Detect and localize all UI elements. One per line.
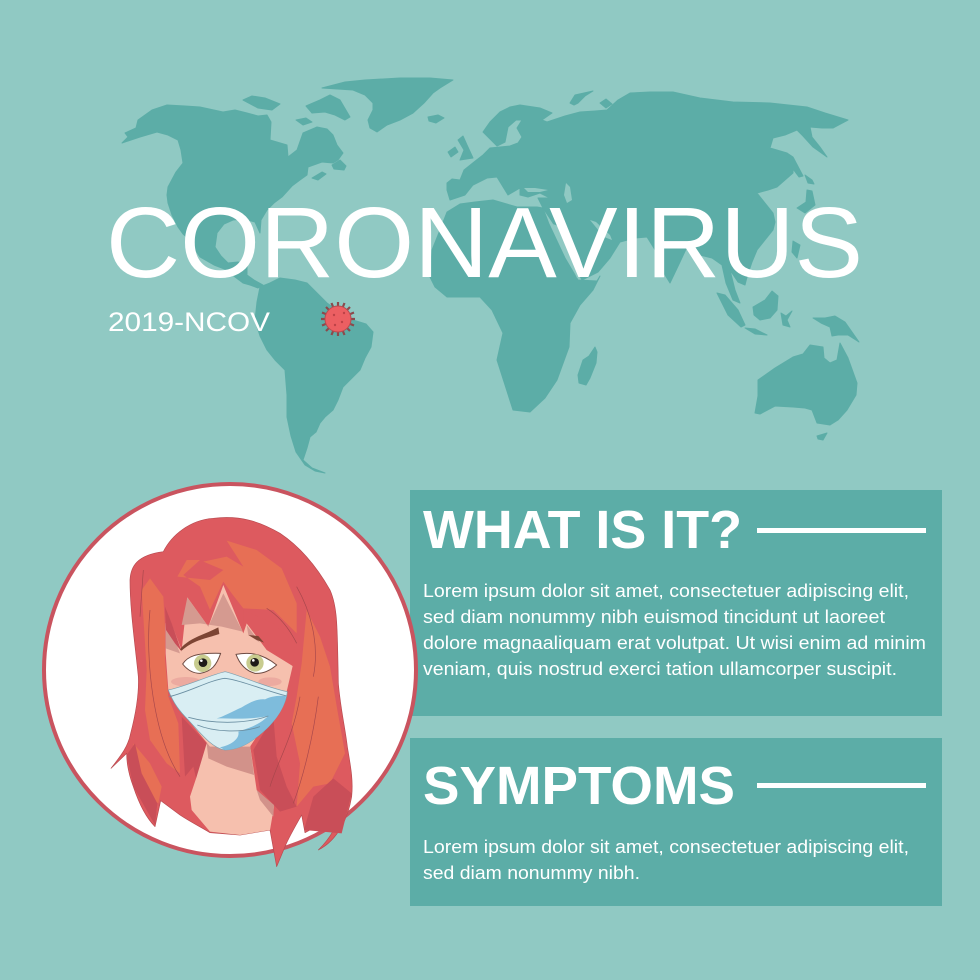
- map: South America: [255, 278, 373, 473]
- mask shading: [217, 696, 286, 750]
- map: North and Central America: [122, 105, 343, 288]
- forehead shadow: [166, 593, 260, 653]
- hair strand lines: [140, 570, 318, 803]
- map: seas (Black Sea, Caspian, Red Sea, Gulf): [524, 183, 612, 278]
- cheek blush: [171, 677, 201, 686]
- illustration: woman wearing mask: [111, 517, 352, 867]
- text block: symptoms: sed diam nonummy nibh.: [423, 863, 640, 883]
- map: Arctic islands: [243, 95, 350, 125]
- neck shadow: [207, 743, 274, 817]
- map: Eurasia: [447, 92, 848, 303]
- hair dark strands: [127, 717, 352, 833]
- map: New Guinea: [813, 316, 859, 342]
- panel: what is it: [410, 490, 942, 716]
- portrait circle: [44, 484, 416, 856]
- map: Novaya Zemlya and Russian islands: [570, 91, 612, 108]
- subtitle: 2019-NCOV: [108, 307, 270, 337]
- map: British Isles: [448, 136, 473, 160]
- panel: symptoms: [410, 738, 942, 906]
- world map: [122, 78, 859, 473]
- heading: symptoms: SYMPTOMS: [423, 756, 735, 816]
- front hair strands: [165, 607, 182, 652]
- title: CORONAVIRUS: [106, 187, 863, 299]
- map: Africa: [430, 200, 600, 412]
- heading: what is it: WHAT IS IT?: [423, 500, 742, 560]
- hair highlights: [133, 578, 180, 803]
- map: Greenland: [322, 78, 453, 132]
- hair back: [111, 517, 352, 867]
- face: [166, 585, 293, 747]
- eyebrows: [180, 627, 264, 651]
- eyes: [183, 653, 277, 673]
- text block: symptoms: [423, 837, 909, 883]
- text block: what is it: [423, 581, 926, 679]
- text block: what is it: dolore magnaaliquam erat volutpat. Ut wisi enim ad minim: [423, 633, 926, 653]
- map: Madagascar: [578, 347, 597, 385]
- mask folds: [169, 678, 287, 731]
- text block: what is it: sed diam nonummy nibh euismod tincidunt ut laoreet: [423, 607, 885, 627]
- face mask: [168, 672, 287, 750]
- map: Sakhalin and Japan: [787, 153, 815, 213]
- text block: symptoms: Lorem ipsum dolor sit amet, consectetuer adipiscing elit,: [423, 837, 909, 857]
- text block: what is it: Lorem ipsum dolor sit amet, consectetuer adipiscing elit,: [423, 581, 909, 601]
- neck: [190, 743, 274, 835]
- map: Newfoundland and coast islands: [312, 160, 346, 180]
- icon: virus: [321, 302, 355, 336]
- text block: what is it: veniam, quis nostrud exerci tation ullamcorper suscipit.: [423, 659, 897, 679]
- map: Australia: [755, 343, 857, 440]
- map: Indonesia and Philippines: [717, 241, 800, 335]
